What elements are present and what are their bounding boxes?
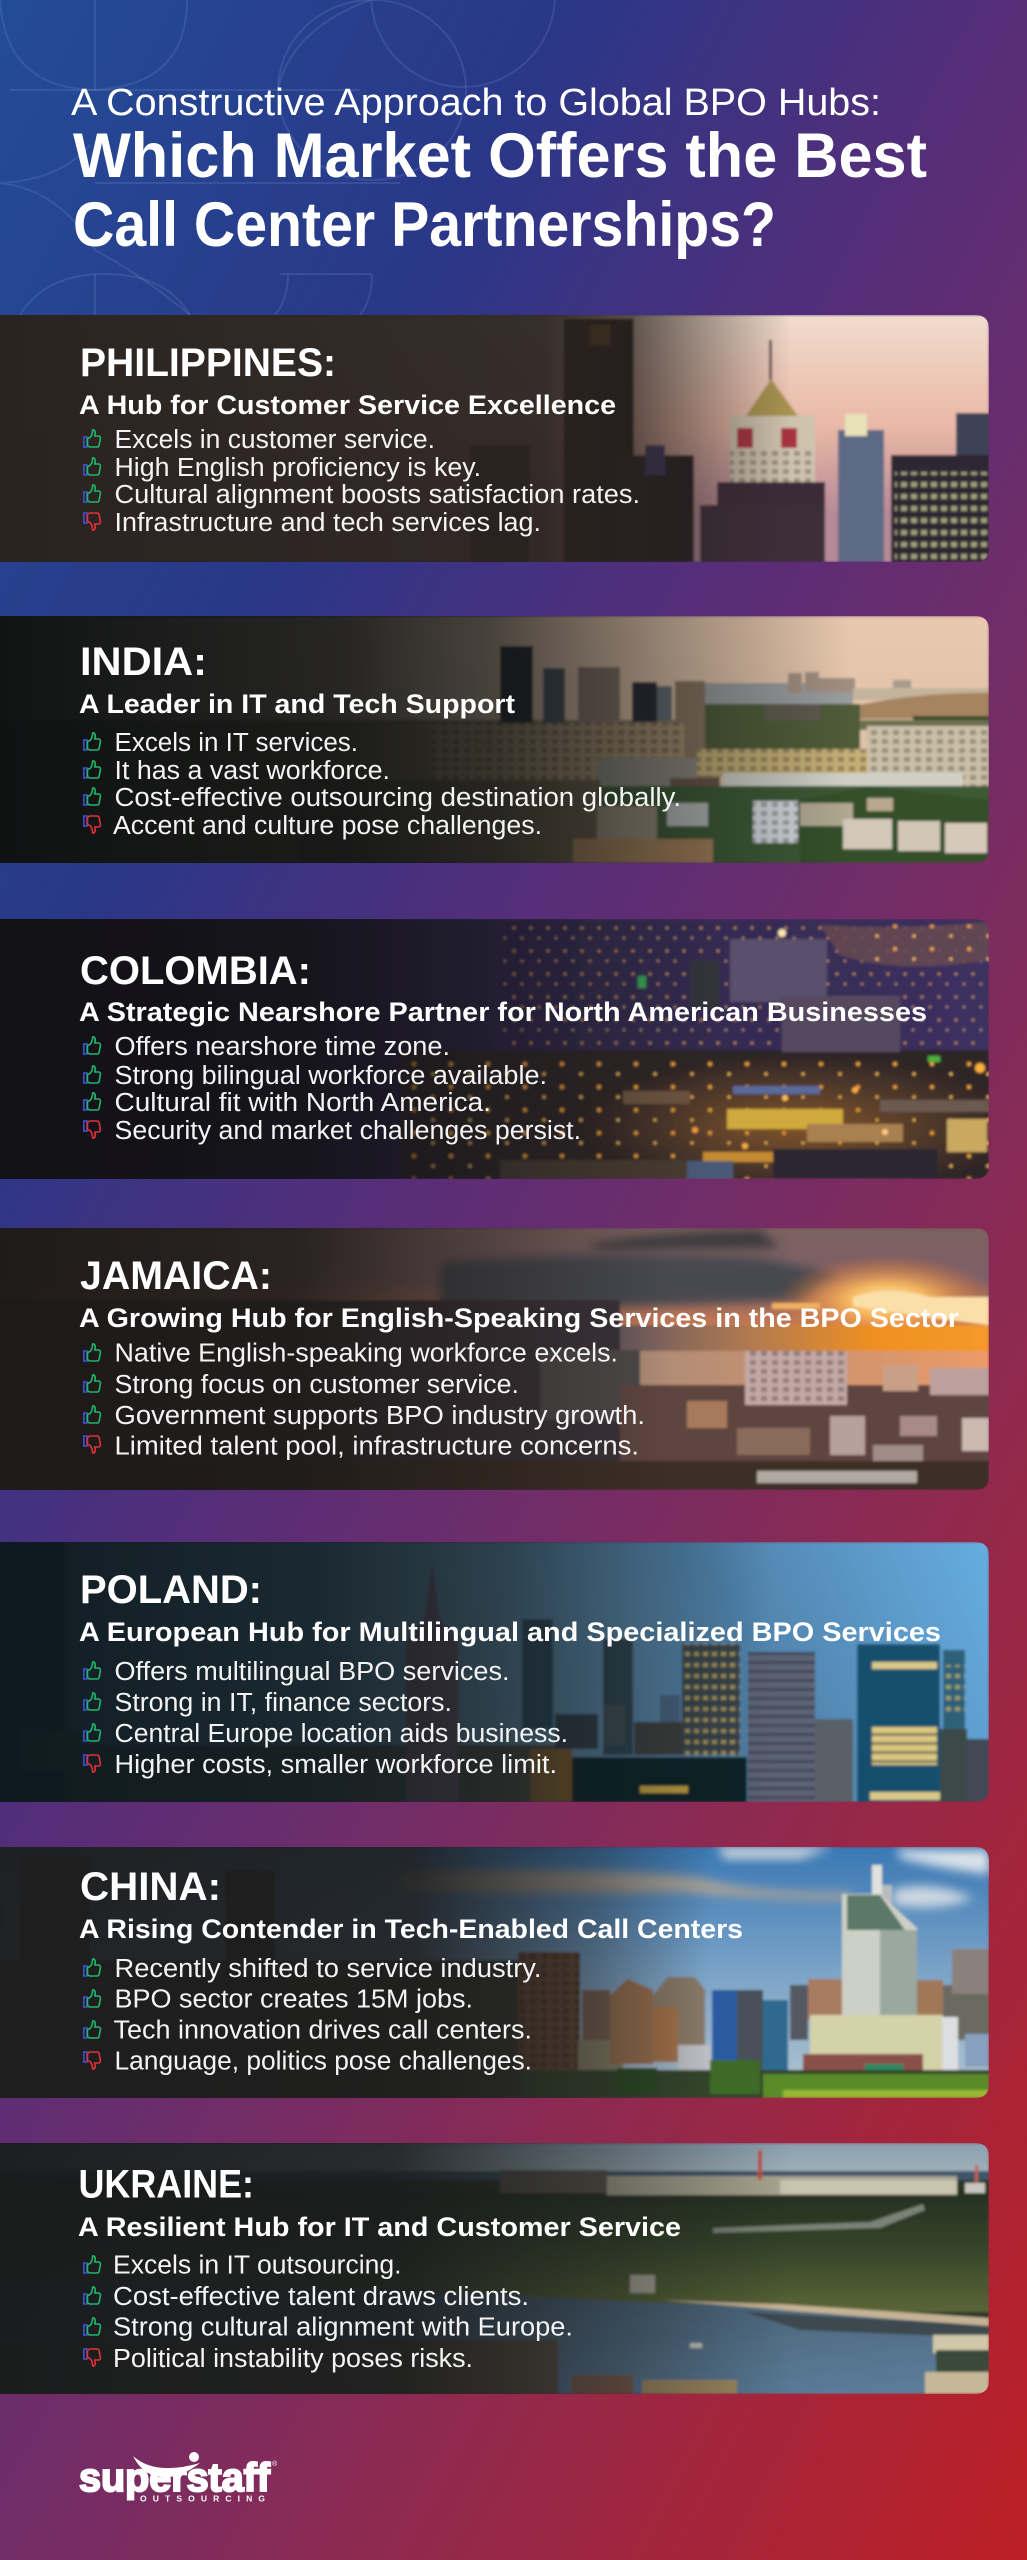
panel: Poland (0, 1542, 989, 1802)
list: Colombia points: Cultural fit with North America. (114, 1089, 491, 1117)
list: Philippines points: Cultural alignment boosts satisfaction rates. (114, 481, 640, 509)
panel: Philippines (0, 315, 989, 562)
list: India points: Excels in IT services. (114, 729, 358, 757)
heading: India: INDIA: (80, 640, 207, 684)
list: Philippines points: Infrastructure and tech services lag. (114, 509, 541, 537)
panel: Jamaica (0, 1228, 997, 1490)
heading: Philippines: PHILIPPINES: (80, 341, 336, 385)
heading: Jamaica: JAMAICA: (80, 1254, 272, 1298)
photo: India cityscape (0, 616, 989, 863)
subheading: Philippines: A Hub for Customer Service Excellence (79, 390, 616, 420)
subheading: India: A Leader in IT and Tech Support (79, 689, 515, 719)
list: India points (84, 729, 681, 840)
subheading: Colombia: A Strategic Nearshore Partner for North American Businesses (79, 997, 927, 1027)
heading: Colombia: COLOMBIA: (80, 949, 311, 993)
photo: Ukraine river landscape (0, 2143, 989, 2394)
list: China points: BPO sector creates 15M jobs. (114, 1986, 473, 2014)
title: Which Market Offers the Best (73, 121, 927, 191)
panel: Ukraine (0, 2143, 989, 2394)
list: Jamaica points: Government supports BPO industry growth. (114, 1402, 645, 1430)
list: Jamaica points: Strong focus on customer service. (114, 1371, 519, 1399)
list: Jamaica points: Native English-speaking workforce excels. (114, 1340, 618, 1368)
heading: Ukraine: UKRAINE: (78, 2162, 254, 2206)
list: Jamaica points: Limited talent pool, infrastructure concerns. (114, 1432, 639, 1460)
list: Jamaica points (84, 1340, 645, 1460)
photo: Philippines skyline (0, 315, 989, 562)
list: Colombia points (84, 1033, 581, 1145)
list: India points: It has a vast workforce. (114, 757, 390, 785)
panel: Colombia (0, 919, 1020, 1195)
photo: Poland skyline (0, 1542, 989, 1802)
logo: Superstaff Outsourcing: ® (272, 2460, 278, 2468)
list: China points: Recently shifted to service industry. (114, 1955, 542, 1983)
panel: India (0, 616, 989, 863)
list: Philippines points: High English proficiency is key. (114, 454, 481, 482)
list: Colombia points: Security and market challenges persist. (114, 1117, 581, 1145)
list: Colombia points: Strong bilingual workforce available. (114, 1062, 547, 1090)
panel: China (0, 1847, 989, 2098)
list: Philippines points (84, 426, 640, 537)
list: Poland points (84, 1658, 568, 1779)
logo: Superstaff Outsourcing: OUTSOURCING (140, 2494, 265, 2504)
subheading: Ukraine: A Resilient Hub for IT and Customer Service (78, 2212, 681, 2242)
list: India points: Cost-effective outsourcing destination globally. (114, 784, 681, 812)
title (71, 82, 927, 260)
title: Call Center Partnerships? (73, 190, 776, 260)
list: Ukraine points: Cost-effective talent draws clients. (113, 2283, 529, 2311)
decorative line pattern (0, 0, 555, 315)
list: Ukraine points: Strong cultural alignment with Europe. (113, 2314, 573, 2342)
list: China points: Tech innovation drives call centers. (114, 2016, 532, 2044)
list: Poland points: Offers multilingual BPO services. (114, 1658, 509, 1686)
title: A Constructive Approach to Global BPO Hubs: (71, 82, 881, 124)
logo: Superstaff Outsourcing: superstaff (79, 2456, 271, 2500)
subheading: Poland: A European Hub for Multilingual and Specialized BPO Services (79, 1617, 941, 1647)
list: Poland points: Strong in IT, finance sectors. (114, 1689, 452, 1717)
list: Ukraine points: Political instability poses risks. (113, 2345, 473, 2373)
photo: Colombia night city (0, 919, 1020, 1195)
list: Ukraine points (84, 2252, 573, 2373)
photo: China skyline (0, 1847, 989, 2098)
list: India points: Accent and culture pose challenges. (113, 812, 542, 840)
heading: Poland: POLAND: (80, 1568, 262, 1612)
list: Ukraine points: Excels in IT outsourcing. (113, 2252, 402, 2280)
photo: Jamaica sunset (0, 1228, 997, 1490)
subheading: Jamaica: A Growing Hub for English-Speaking Services in the BPO Sector (79, 1303, 960, 1333)
list: Poland points: Central Europe location aids business. (114, 1720, 568, 1748)
heading: China: CHINA: (80, 1865, 221, 1909)
list: Colombia points: Offers nearshore time zone. (114, 1033, 450, 1061)
list: Philippines points: Excels in customer service. (114, 426, 435, 454)
subheading: China: A Rising Contender in Tech-Enabled Call Centers (79, 1914, 743, 1944)
list: China points: Language, politics pose challenges. (114, 2048, 532, 2076)
list: China points (84, 1955, 542, 2076)
list: Poland points: Higher costs, smaller workforce limit. (114, 1751, 557, 1779)
